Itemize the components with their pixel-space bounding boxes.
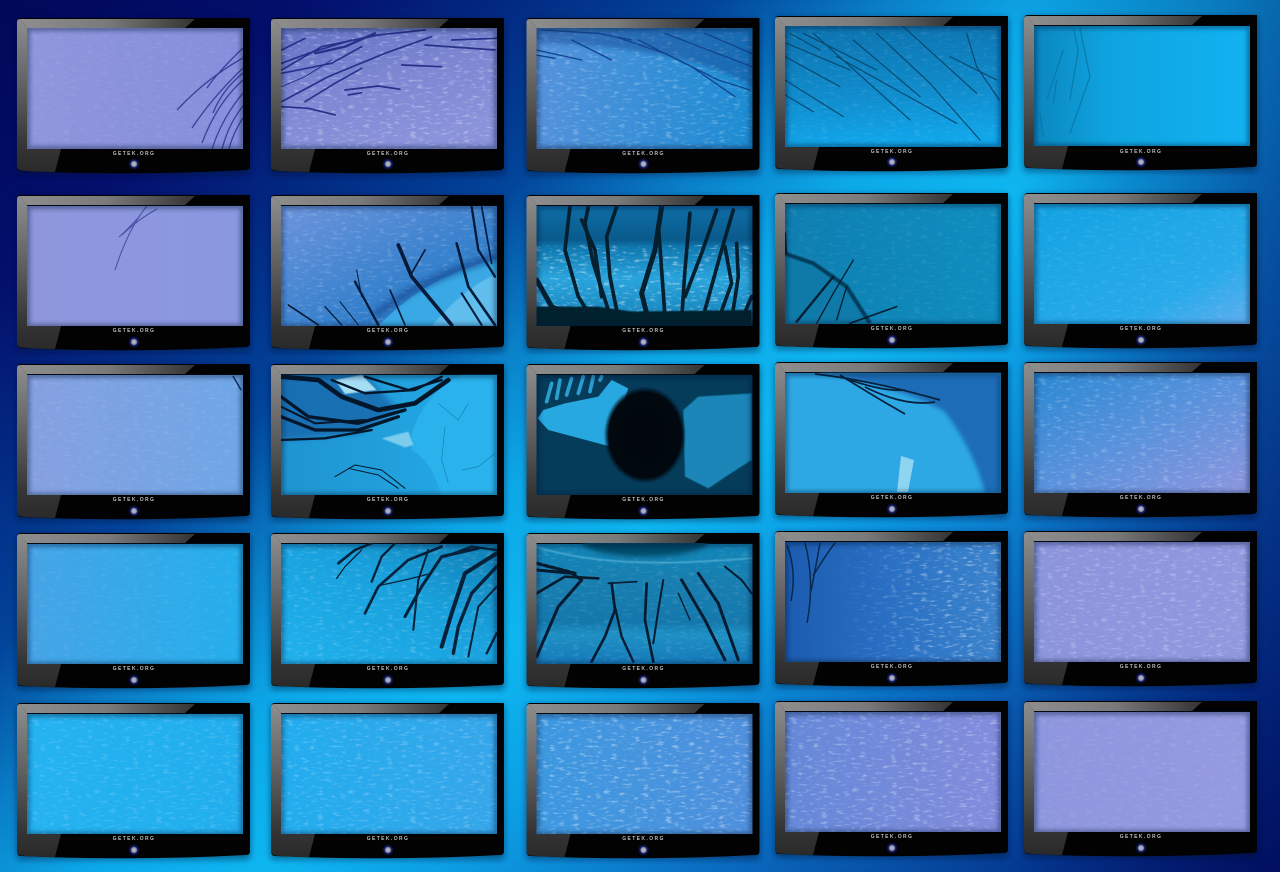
monitor row 4 column 5 (1023, 531, 1258, 688)
monitor row 1 column 1 (16, 18, 251, 175)
brand label: GETEK.ORG (871, 326, 913, 332)
screen: blue speckled skin (536, 714, 752, 835)
monitor row 3 column 4 (774, 362, 1009, 519)
screen: sky blue skin (27, 544, 243, 665)
screen: lower eyelid with downward lashes (536, 527, 766, 665)
power button (886, 156, 898, 168)
screen: eye white at left, blue lid at right (785, 373, 1001, 494)
power button (1135, 672, 1147, 684)
brand label: GETEK.ORG (622, 836, 665, 842)
monitor row 5 column 1 (16, 703, 251, 860)
screen: deep blue skin, speckled at right (785, 542, 1001, 663)
screen: cyan skin with fan of black lashes (281, 543, 497, 665)
left sclera (538, 380, 628, 446)
screen: cyan skin (27, 714, 243, 835)
brand label: GETEK.ORG (113, 151, 155, 157)
monitor row 1 column 5 (1023, 15, 1258, 172)
power button (1135, 503, 1147, 515)
monitor row 5 column 5 (1023, 701, 1258, 858)
monitor row 2 column 5 (1023, 193, 1258, 350)
power button (128, 674, 140, 686)
monitor row 4 column 4 (774, 531, 1009, 688)
power button (1135, 156, 1147, 168)
brand label: GETEK.ORG (113, 666, 155, 672)
power button (886, 672, 898, 684)
monitor row 2 column 1 (16, 195, 251, 352)
screen: cyan skin (1034, 204, 1250, 325)
brand label: GETEK.ORG (1120, 664, 1162, 670)
screen: eye with upright black lashes (536, 206, 752, 327)
brand label: GETEK.ORG (367, 328, 409, 334)
brand label: GETEK.ORG (1120, 326, 1162, 332)
brand label: GETEK.ORG (622, 151, 665, 157)
monitor row 2 column 4 (774, 193, 1009, 350)
screen: teal skin with diagonal lashes (785, 26, 1001, 147)
brand label: GETEK.ORG (367, 666, 409, 672)
screen: lower eyelid corner with lashes (281, 206, 498, 327)
brand label: GETEK.ORG (871, 664, 913, 670)
power button (638, 336, 650, 348)
brand label: GETEK.ORG (367, 151, 409, 157)
pupil (604, 386, 686, 484)
power button (1135, 842, 1147, 854)
power button (638, 505, 650, 517)
power button (638, 158, 650, 170)
monitor row 1 column 4 (774, 16, 1009, 173)
power button (638, 674, 650, 686)
monitor row 4 column 2 (270, 533, 505, 690)
power button (382, 844, 394, 856)
monitor row 3 column 2 (270, 364, 505, 521)
brand label: GETEK.ORG (113, 836, 155, 842)
power button (382, 674, 394, 686)
monitor row 1 column 2 (270, 18, 505, 175)
brand label: GETEK.ORG (871, 149, 913, 155)
screen: purple skin with lashes at right (27, 28, 243, 149)
brand label: GETEK.ORG (622, 666, 665, 672)
brand label: GETEK.ORG (622, 328, 665, 334)
screen: lavender speckled skin (1034, 542, 1250, 663)
monitor row 1 column 3 (526, 18, 760, 175)
screen: cyan skin with faint lashes (1034, 26, 1250, 147)
brand label: GETEK.ORG (871, 495, 913, 501)
screen: outer eye corner with lashes (784, 204, 1001, 325)
screen: periwinkle speckled skin (785, 712, 1001, 833)
monitor row 5 column 4 (774, 701, 1009, 858)
power button (128, 505, 140, 517)
monitor row 3 column 1 (16, 364, 251, 521)
power button (886, 842, 898, 854)
brand label: GETEK.ORG (367, 497, 409, 503)
monitor row 4 column 3 (526, 527, 766, 690)
screen: eye white with black upper lashes (281, 375, 498, 497)
power button (886, 503, 898, 515)
power button (128, 158, 140, 170)
screen: purple skin with dark lashes at top (281, 28, 497, 149)
power button (382, 158, 394, 170)
power button (382, 336, 394, 348)
power button (638, 844, 650, 856)
monitor row 4 column 1 (16, 533, 251, 690)
power button (886, 334, 898, 346)
screen: blue skin with thin lashes (536, 28, 752, 149)
monitor row 2 column 2 (270, 195, 505, 352)
monitor row 3 column 5 (1023, 362, 1258, 519)
brand label: GETEK.ORG (622, 497, 665, 503)
screen: lavender blue skin (27, 375, 243, 496)
brand label: GETEK.ORG (871, 834, 913, 840)
power button (1135, 334, 1147, 346)
brand label: GETEK.ORG (367, 836, 409, 842)
monitor row 3 column 3 (526, 364, 760, 521)
brand label: GETEK.ORG (1120, 495, 1162, 501)
power button (128, 844, 140, 856)
screen: cyan skin (281, 714, 497, 835)
screen: purple skin with one hair (27, 206, 243, 327)
screen: dark iris, pupil and sclera (536, 375, 752, 496)
screen: blue to lavender skin (1034, 373, 1250, 494)
monitor row 2 column 3 (526, 195, 760, 352)
monitor row 5 column 2 (270, 703, 505, 860)
brand label: GETEK.ORG (1120, 834, 1162, 840)
monitor row 5 column 3 (526, 703, 760, 860)
lashes over sclera (547, 377, 602, 402)
screen: lavender skin (1034, 712, 1250, 833)
brand label: GETEK.ORG (113, 497, 155, 503)
power button (382, 505, 394, 517)
right sclera (683, 393, 752, 488)
power button (128, 336, 140, 348)
brand label: GETEK.ORG (1120, 149, 1162, 155)
brand label: GETEK.ORG (113, 328, 155, 334)
